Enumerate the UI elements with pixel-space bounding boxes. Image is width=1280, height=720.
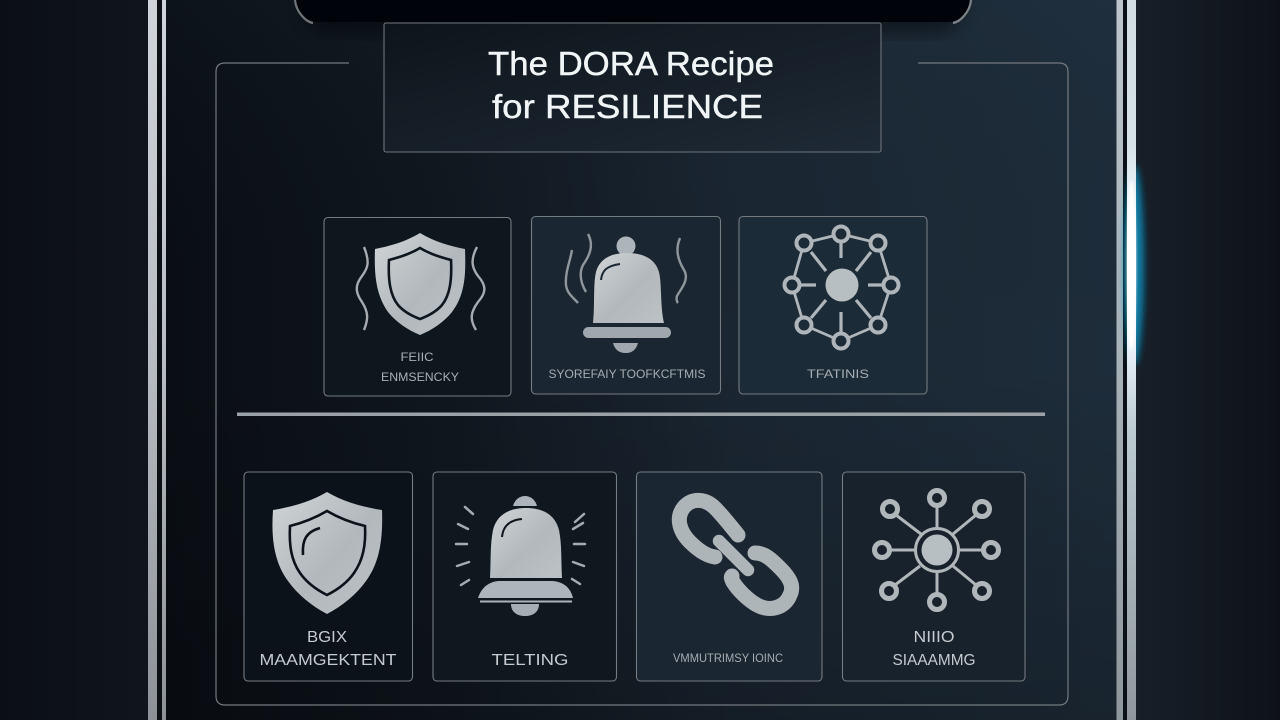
label xyxy=(260,629,397,669)
label: SYOREFAIY TOOFKCFTMIS xyxy=(548,369,706,381)
left metallic rails xyxy=(148,0,166,720)
bottom card: risk management xyxy=(244,472,412,681)
right metallic rails with blue glow xyxy=(1116,0,1144,720)
label: BGIX xyxy=(307,629,348,646)
icon: shield with waves xyxy=(357,233,484,335)
title box xyxy=(384,23,881,152)
divider xyxy=(237,412,1045,416)
bottom card: third-party chain xyxy=(636,472,822,681)
label: ENMSENCKY xyxy=(381,372,459,384)
label xyxy=(381,352,459,384)
label: SIAAAMMG xyxy=(892,652,976,669)
label: FEIIC xyxy=(400,352,434,364)
bottom card: testing xyxy=(433,472,616,681)
label xyxy=(892,629,976,669)
label: TFATINIS xyxy=(807,369,869,381)
label: MAAMGEKTENT xyxy=(260,652,397,669)
top card: risk management xyxy=(324,218,511,396)
label: VMMUTRIMSY IOINC xyxy=(673,651,783,665)
top dark pill xyxy=(295,0,971,34)
icon: ringing bell xyxy=(456,496,585,616)
background: left margin xyxy=(0,0,148,720)
background: right margin xyxy=(1136,0,1280,720)
top card: incident reporting xyxy=(532,216,720,394)
label: TELTING xyxy=(492,652,568,669)
outer frame with top gap xyxy=(216,63,1068,705)
background: central panel xyxy=(166,0,1117,720)
icon: hub and spoke network xyxy=(874,490,998,610)
label: NIIIO xyxy=(914,629,954,646)
top card: testing network xyxy=(739,216,927,394)
icon: network ring xyxy=(784,226,898,348)
icon: shield xyxy=(272,492,382,614)
title: for RESILIENCE xyxy=(492,88,763,125)
bottom card: info sharing xyxy=(842,472,1025,681)
icon: chain link xyxy=(679,500,792,608)
icon: bell with waves xyxy=(566,234,686,353)
title xyxy=(488,45,774,125)
title: The DORA Recipe xyxy=(488,45,774,82)
